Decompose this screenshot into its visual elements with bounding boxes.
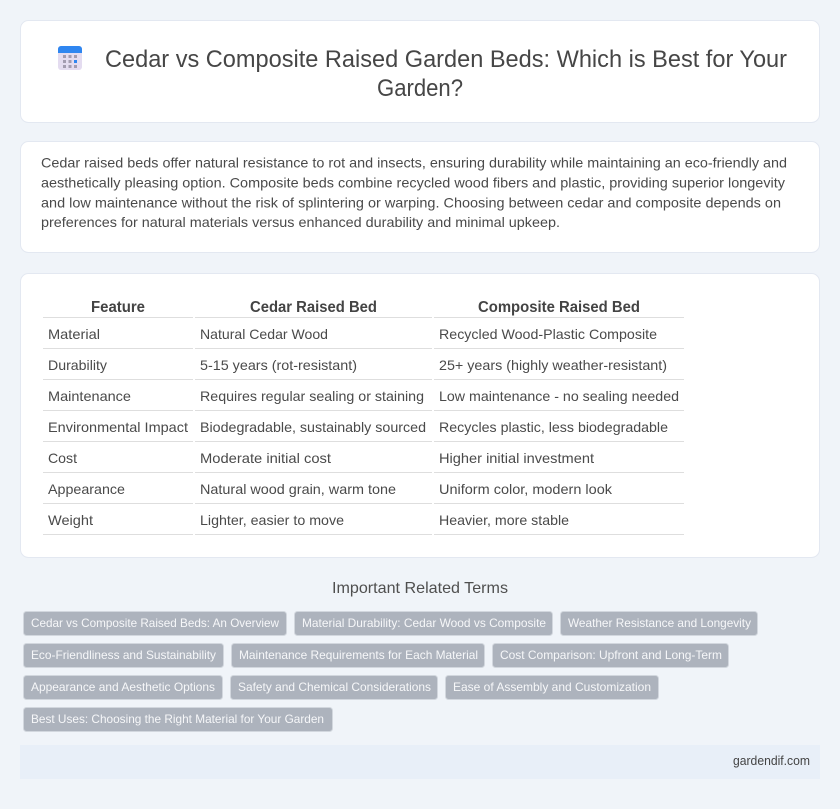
row: maintenance: Requires regular sealing or staining (200, 388, 424, 404)
summary paragraph: Cedar raised beds offer natural resistance to rot and insects, ensuring durability while maintaining an eco-friendly and (41, 154, 787, 170)
tag (24, 708, 332, 732)
row: appearance (48, 481, 613, 497)
tag: Best Uses: Choosing the Right Material for Your Garden (31, 712, 324, 726)
row: maintenance (48, 388, 679, 404)
icon: calendar grid (58, 46, 82, 70)
panel: header (20, 20, 820, 122)
title: Garden? (377, 75, 463, 102)
row: weight (48, 512, 569, 528)
table header row (91, 299, 640, 316)
row: maintenance: Maintenance (48, 388, 131, 404)
tag: Appearance and Aesthetic Options (31, 680, 215, 694)
panel: summary text (20, 142, 820, 252)
row: environmental impact: Recycles plastic, less biodegradable (439, 419, 668, 435)
tag (492, 644, 728, 668)
row: weight: Weight (48, 512, 93, 528)
tag (24, 612, 286, 636)
footer (20, 745, 820, 779)
panel: comparison table (20, 274, 820, 558)
table header row: Feature (91, 299, 145, 316)
tag (446, 676, 658, 700)
row: cost: Moderate initial cost (200, 450, 331, 466)
tag (230, 676, 438, 700)
tag: Cost Comparison: Upfront and Long-Term (500, 648, 722, 662)
row: appearance: Natural wood grain, warm tone (200, 481, 396, 497)
row: material: Natural Cedar Wood (200, 326, 328, 342)
tag: Eco-Friendliness and Sustainability (31, 648, 216, 662)
row: durability: 5-15 years (rot-resistant) (200, 357, 357, 373)
tag (232, 644, 484, 668)
footer site name: gardendif.com (733, 754, 810, 768)
row: durability: Durability (48, 357, 107, 373)
row: cost (48, 450, 594, 466)
summary paragraph: preferences for natural materials versus enhanced durability and minimal upkeep. (41, 214, 560, 230)
tag: Ease of Assembly and Customization (453, 680, 651, 694)
row: material (48, 326, 657, 342)
tag (294, 612, 552, 636)
row: appearance: Uniform color, modern look (439, 481, 613, 497)
summary paragraph: aesthetically pleasing option. Composite beds combine recycled wood fibers and plastic, providing superior longevity (41, 174, 785, 190)
tag: Maintenance Requirements for Each Material (239, 648, 478, 662)
row: environmental impact: Environmental Impact (48, 419, 188, 435)
tag: Safety and Chemical Considerations (238, 680, 431, 694)
row: cost: Higher initial investment (439, 450, 594, 466)
row: cost: Cost (48, 450, 77, 466)
tag (560, 612, 758, 636)
row: durability (48, 357, 667, 373)
tag: Weather Resistance and Longevity (568, 616, 751, 630)
table header row: Composite Raised Bed (478, 299, 640, 316)
row: environmental impact (48, 419, 668, 435)
summary paragraph: and low maintenance without the risk of splintering or warping. Choosing between cedar and composite depends on (41, 194, 781, 210)
tag: Cedar vs Composite Raised Beds: An Overview (31, 616, 279, 630)
row: weight: Lighter, easier to move (200, 512, 344, 528)
related terms tags (24, 612, 758, 732)
summary paragraph (41, 154, 787, 230)
row: weight: Heavier, more stable (439, 512, 569, 528)
tag (24, 676, 222, 700)
row: material: Material (48, 326, 100, 342)
row: durability: 25+ years (highly weather-resistant) (439, 357, 667, 373)
row: maintenance: Low maintenance - no sealing needed (439, 388, 679, 404)
row: material: Recycled Wood-Plastic Composite (439, 326, 657, 342)
row: appearance: Appearance (48, 481, 125, 497)
title (105, 46, 787, 102)
heading: important related terms: Important Related Terms (332, 580, 508, 597)
title: Cedar vs Composite Raised Garden Beds: Which is Best for Your (105, 46, 787, 73)
tag (24, 644, 224, 668)
table header row: Cedar Raised Bed (250, 299, 377, 316)
row: environmental impact: Biodegradable, sustainably sourced (200, 419, 426, 435)
tag: Material Durability: Cedar Wood vs Composite (302, 616, 546, 630)
